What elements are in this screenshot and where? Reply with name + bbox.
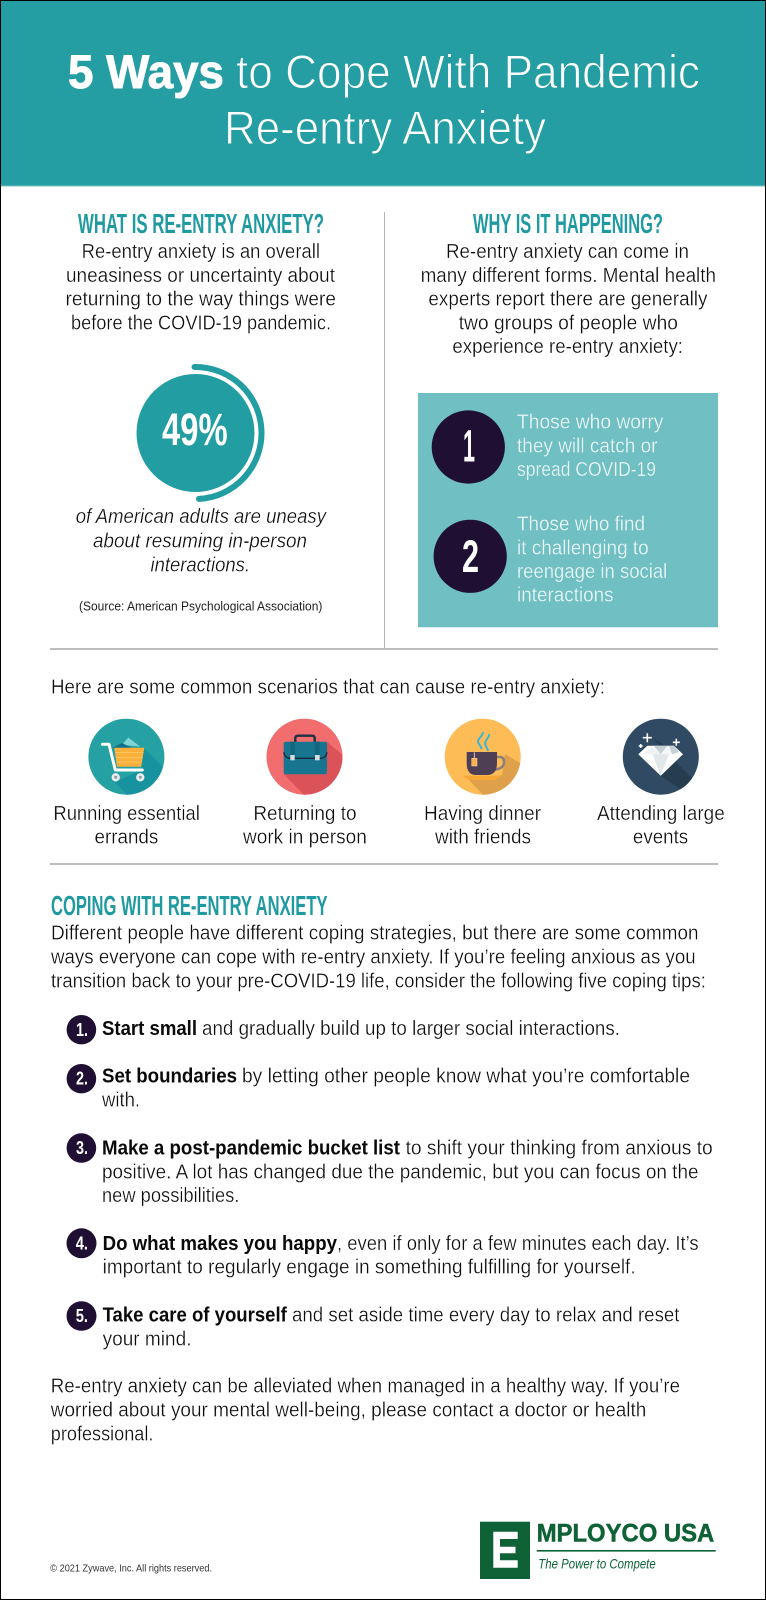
- text block: closing note: professional.: [51, 1424, 153, 1446]
- tip 3: [67, 1133, 713, 1207]
- group 2 badge: [434, 520, 507, 593]
- title: to Cope With Pandemic: [236, 45, 700, 98]
- scenarios intro text: Here are some common scenarios that can cause re-entry anxiety:: [51, 676, 605, 698]
- label: with friends: [434, 826, 531, 848]
- tip 5: and set aside time every day to relax and reset: [292, 1304, 680, 1326]
- text block: closing note: worried about your mental well-being, please contact a doctor or health: [50, 1400, 646, 1422]
- title: 5 Ways: [68, 45, 224, 98]
- tip 5: [66, 1301, 680, 1350]
- tip 3: to shift your thinking from anxious to: [406, 1137, 713, 1159]
- panel: why is it happening: [418, 208, 718, 627]
- group 2 text: interactions: [517, 585, 614, 607]
- icon: briefcase: [266, 719, 345, 796]
- text block: statistic caption: of American adults are uneasy: [76, 506, 327, 528]
- heading: what is re-entry anxiety: WHAT IS RE-ENTRY ANXIETY?: [78, 208, 324, 239]
- group 2 text: reengage in social: [517, 561, 667, 583]
- label: Running essential: [53, 803, 200, 825]
- text block: coping intro: [50, 922, 706, 992]
- group 2 text: [517, 514, 667, 607]
- title: Re-entry Anxiety: [224, 101, 546, 154]
- label: [424, 803, 541, 848]
- text block: explanation: experience re-entry anxiety:: [452, 336, 683, 358]
- scenario: running essential errands: [53, 719, 200, 848]
- icon: cup of tea: [444, 718, 521, 795]
- text block: closing note: Re-entry anxiety can be alleviated when managed in a healthy way. If you’re: [51, 1376, 680, 1398]
- tip 2: by letting other people know what you’re comfortable: [242, 1065, 690, 1087]
- scenario: having dinner with friends: [424, 719, 541, 848]
- tip 5: your mind.: [103, 1328, 192, 1350]
- text block: coping intro: transition back to your pre-COVID-19 life, consider the following five coping tips:: [51, 970, 706, 992]
- text block: statistic caption: about resuming in-person: [93, 530, 307, 552]
- chart: 49 percent ring: [136, 367, 262, 499]
- text block: statistic caption: [76, 506, 327, 576]
- label: work in person: [242, 826, 367, 848]
- text block: explanation: two groups of people who: [459, 312, 678, 334]
- tip 3: Make a post-pandemic bucket list: [102, 1137, 400, 1159]
- group 1 text: spread COVID-19: [517, 459, 656, 481]
- text block: explanation: [421, 241, 716, 358]
- text block: coping intro: ways everyone can cope with re-entry anxiety. If you’re feeling anxious as you: [50, 946, 696, 968]
- group 2 text: Those who find: [517, 514, 645, 536]
- tip 1: Start small: [102, 1018, 197, 1040]
- text block: definition: before the COVID-19 pandemic.: [71, 312, 331, 334]
- text block: coping intro: Different people have different coping strategies, but there are some common: [51, 922, 698, 944]
- tip 4: , even if only for a few minutes each day. It’s: [337, 1233, 699, 1255]
- text block: statistic caption: interactions.: [150, 554, 250, 576]
- icon: diamond: [623, 719, 700, 796]
- label: errands: [94, 826, 158, 848]
- label: [242, 803, 367, 848]
- tip 3: positive. A lot has changed due the pandemic, but you can focus on the: [102, 1161, 698, 1183]
- text block: explanation: experts report there are generally: [428, 288, 707, 310]
- heading: coping with re-entry anxiety: COPING WITH RE-ENTRY ANXIETY: [51, 890, 328, 921]
- icon: shopping cart: [88, 719, 166, 796]
- tip 5: 5.: [76, 1306, 88, 1326]
- header banner: [0, 0, 766, 186]
- panel: what is re-entry anxiety: [66, 208, 336, 614]
- group 1 text: [517, 411, 663, 481]
- tip 4: 4.: [76, 1233, 88, 1253]
- tip 1: and gradually build up to larger social interactions.: [202, 1018, 620, 1040]
- label: Having dinner: [424, 803, 541, 825]
- tip 3: 3.: [76, 1138, 88, 1158]
- label: Attending large: [597, 803, 725, 825]
- copyright: © 2021 Zywave, Inc. All rights reserved.: [50, 1563, 212, 1575]
- logo: Employco USA: MPLOYCO USA: [537, 1520, 714, 1548]
- text block: definition: [66, 241, 336, 334]
- label: Returning to: [253, 803, 356, 825]
- logo: Employco USA: [480, 1520, 716, 1579]
- label: [53, 803, 200, 848]
- label: events: [633, 826, 688, 848]
- tip 1: [67, 1015, 620, 1044]
- tip 4: Do what makes you happy: [103, 1233, 338, 1255]
- tip 2: Set boundaries: [102, 1065, 237, 1087]
- panel: coping section: [50, 890, 713, 1446]
- text block: definition: Re-entry anxiety is an overall: [82, 241, 320, 263]
- group 1 badge: [432, 410, 505, 484]
- text block: closing note: [50, 1376, 680, 1446]
- text block: explanation: many different forms. Mental health: [421, 265, 716, 287]
- tip 2: 2.: [76, 1068, 88, 1088]
- logo: Employco USA: The Power to Compete: [538, 1555, 656, 1571]
- group 2 badge: 2: [462, 531, 479, 582]
- tip 2: [67, 1064, 690, 1112]
- chart: 49 percent ring: 49%: [162, 404, 228, 455]
- text block: definition: uneasiness or uncertainty about: [66, 265, 335, 287]
- tip 3: new possibilities.: [102, 1185, 239, 1207]
- panel: two groups box: [418, 393, 718, 627]
- tip 5: Take care of yourself: [103, 1304, 287, 1326]
- title: [68, 45, 700, 154]
- tip 4: [66, 1228, 699, 1279]
- tip 1: 1.: [76, 1020, 88, 1040]
- tip 4: important to regularly engage in something fulfilling for yourself.: [103, 1257, 636, 1279]
- text block: definition: returning to the way things were: [66, 288, 336, 310]
- label: [597, 803, 725, 848]
- group 1 text: Those who worry: [517, 411, 663, 433]
- group 1 badge: 1: [463, 421, 475, 472]
- tip 2: with.: [101, 1090, 140, 1112]
- scenario: returning to work in person: [242, 719, 367, 848]
- text block: explanation: Re-entry anxiety can come in: [446, 241, 689, 263]
- source note: (Source: American Psychological Association): [79, 599, 322, 614]
- group 2 text: it challenging to: [517, 537, 649, 559]
- scenario: attending large events: [597, 719, 725, 848]
- group 1 text: they will catch or: [517, 435, 658, 457]
